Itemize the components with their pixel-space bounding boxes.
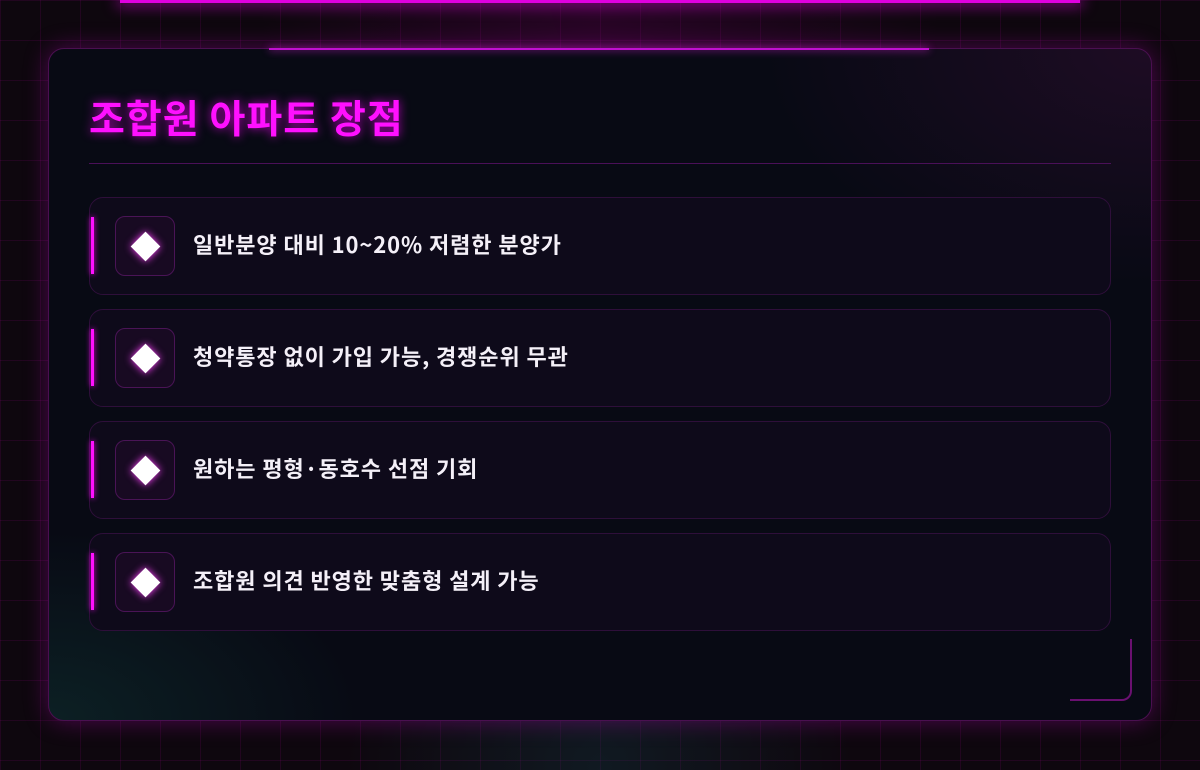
item 2 bbox=[89, 309, 1111, 407]
icon: diamond bbox=[115, 440, 175, 500]
text: 조합원 의견 반영한 맞춤형 설계 가능 bbox=[193, 564, 540, 596]
text: 원하는 평형·동호수 선점 기회 bbox=[193, 452, 478, 484]
icon: diamond bbox=[115, 328, 175, 388]
item 1 bbox=[89, 197, 1111, 295]
item 3 bbox=[89, 421, 1111, 519]
text: 청약통장 없이 가입 가능, 경쟁순위 무관 bbox=[193, 340, 569, 372]
icon: diamond bbox=[115, 552, 175, 612]
item 4 bbox=[89, 533, 1111, 631]
icon: diamond bbox=[115, 216, 175, 276]
title: 조합원 아파트 장점 bbox=[89, 89, 404, 145]
text: 일반분양 대비 10~20% 저렴한 분양가 bbox=[193, 228, 562, 260]
